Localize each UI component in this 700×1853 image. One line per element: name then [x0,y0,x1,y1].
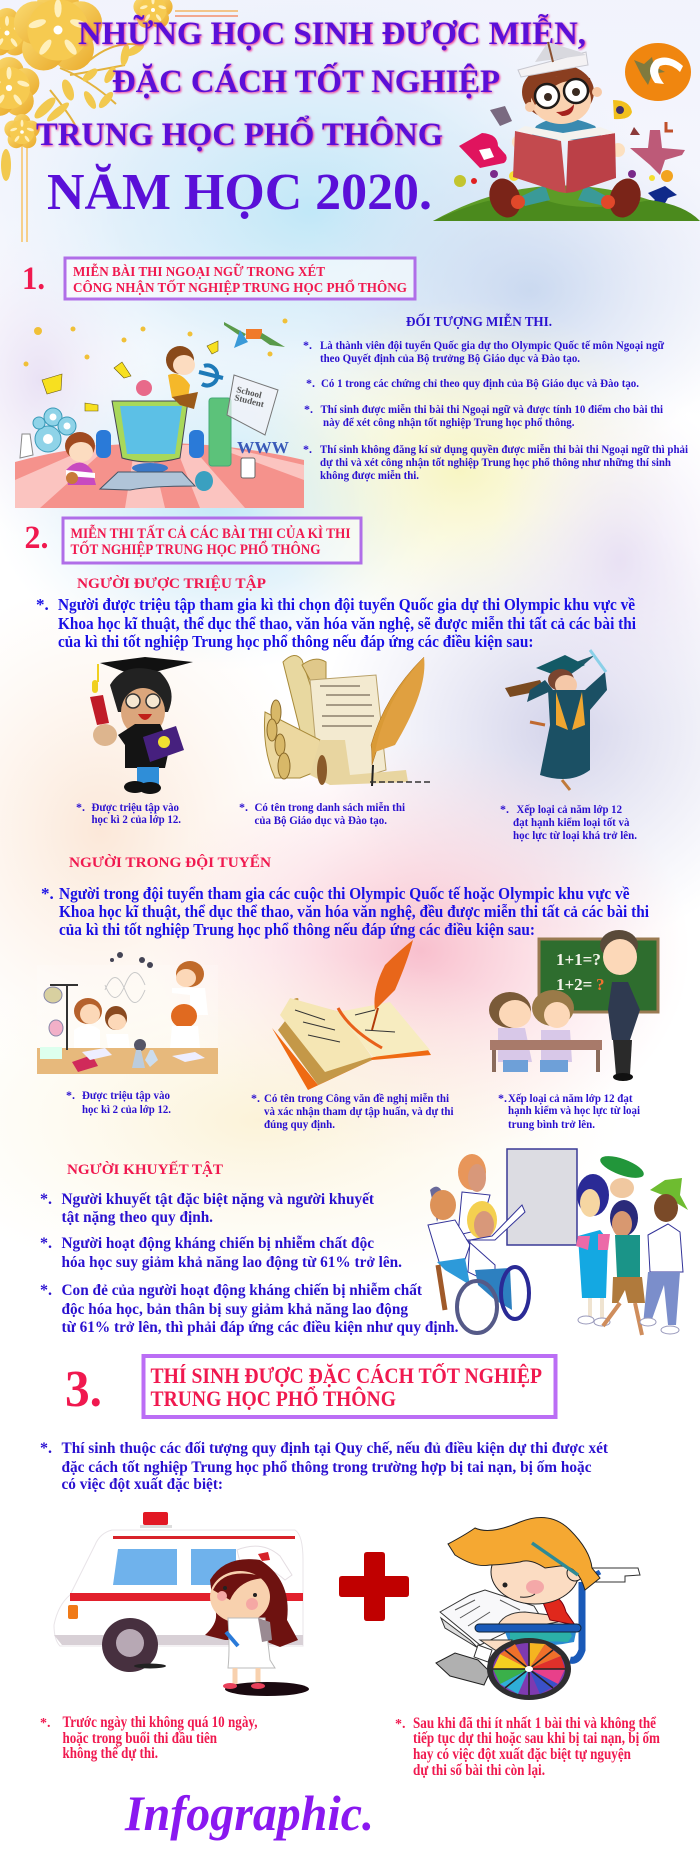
keyboard and mouse [100,472,195,490]
caption: team 3: trung bình trở lên. [508,1117,595,1131]
bullet 1: Là thành viên đội tuyển Quốc gia dự tho Olympic Quốc tế môn Ngoại ngữ [320,338,665,352]
body [505,1627,576,1646]
caption: team 2: *. [251,1091,260,1105]
illustration: classroom with blackboard: 1+2= [556,975,592,994]
bullet 1: theo Quyết định của Bộ trưởng Bộ Giáo dục và Đào tạo. [320,351,580,365]
section 3 heading box: THÍ SINH ĐƯỢC ĐẶC CÁCH TỐT NGHIỆP [150,1363,542,1388]
text block: team members: *. [41,884,54,903]
bullet 3: này để xét công nhận tốt nghiệp Trung học phổ thông. [323,415,574,429]
nurse [205,1546,309,1696]
title year: NĂM HỌC 2020. [47,163,432,221]
title: TRUNG HỌC PHỔ THÔNG [36,114,443,153]
text block: summoned students: Người được triệu tập tham gia kì thi chọn đội tuyển Quốc gia dự thi Olympic khu vực về [58,595,635,614]
person back hat [598,1152,646,1198]
section 3 number: 3. [65,1361,102,1418]
caption: after exam: *. [395,1717,406,1732]
head [491,1540,579,1604]
title: ĐẶC CÁCH TỐT NGHIỆP [112,61,500,100]
bullet 2: *. [306,376,315,390]
text block: special cases: đặc cách tốt nghiệp Trung học phổ thông trong trường hợp bị tai nạn, bị ốm hoặc [62,1459,592,1476]
illustration: boy reading on hill with letters [433,42,700,222]
subheading: disabled students: NGƯỜI KHUYẾT TẬT [67,1161,223,1178]
girl on floor [65,432,96,485]
bullet 4: không được miễn thi. [320,468,419,482]
illustration: graduate boy [90,657,193,794]
text block: disabled students: từ 61% trở lên, thì phải đáp ứng các điều kiện như quy định. [62,1319,458,1336]
text block: disabled students: Người hoạt động kháng chiến bị nhiễm chất độc [62,1235,374,1252]
text block: summoned students: của kì thi tốt nghiệp Trung học phổ thông nếu đáp ứng các điều kiện sau: [58,632,534,651]
hill [433,186,700,221]
section 1 heading box [65,258,415,299]
text block: summoned students: Khoa học kĩ thuật, thể dục thể thao, văn hóa văn nghệ, sẽ được miễn thi tất cả các bài thi [58,614,636,633]
CDs [33,408,76,452]
text block: special cases: có việc đột xuất đặc biệt: [62,1476,223,1493]
subheading: summoned students: NGƯỜI ĐƯỢC TRIỆU TẬP [77,575,266,592]
text block: team members [41,884,649,939]
illustration: open book with quill [272,940,431,1090]
text block: special cases: *. [40,1440,52,1457]
panel: target group for exemption [303,312,689,482]
illustration: scrolls and quill [264,655,431,786]
caption: summoned 1: học kì 2 của lớp 12. [92,812,181,826]
ambulance [54,1512,303,1672]
person girl blue dress [576,1174,610,1326]
text block: disabled students [40,1191,458,1336]
caption: summoned 1 [76,800,181,826]
hat [518,52,588,77]
illustration: classroom with blackboard: ? [596,975,604,994]
text block: special cases: Thí sinh thuộc các đối tượng quy định tại Quy chế, nếu đủ điều kiện dự thi được xét [62,1440,609,1457]
cup [241,458,255,478]
caption: after exam: Sau khi đã thi ít nhất 1 bài thi và không thể [413,1715,657,1732]
folders [42,341,218,411]
caption: before exam: hoặc trong buổi thi đầu tiên [62,1730,217,1747]
illustration: child reading in wheelchair [436,1518,640,1700]
caption: team 3: hạnh kiểm và học lực từ loại [508,1103,641,1117]
decorative gold floral corner [0,0,238,242]
caption: team 1: học kì 2 của lớp 12. [82,1102,171,1116]
caption: team 3: Xếp loại cả năm lớp 12 đạt [508,1091,632,1105]
hair [448,1518,600,1590]
stars [24,318,288,366]
illustration: children with computer: WWW [237,438,289,457]
text block: summoned students: *. [36,595,49,614]
title: NHỮNG HỌC SINH ĐƯỢC MIỄN, [78,13,586,52]
head [522,64,594,120]
bullet 3 [304,402,664,429]
illustration: children with computer [15,318,304,508]
tower [209,398,231,466]
icon: orange G blob [625,43,691,101]
caption: team 2 [251,1091,454,1131]
text block: team members: Người trong đội tuyển tham gia các cuộc thi Olympic Quốc tế hoặc Olympic khu vực về [59,884,630,903]
caption: summoned 3: học lực từ loại khá trở lên. [513,828,637,842]
armrest [475,1624,581,1632]
bullet 4 [303,442,689,482]
text block: special cases [40,1440,609,1493]
text block: team members: của kì thi tốt nghiệp Trung học phổ thông nếu đáp ứng các điều kiện sau: [59,920,535,939]
person in wheelchair [457,1201,529,1333]
bullet 1: *. [303,338,312,352]
speakers [96,430,111,458]
caption: team 2: Có tên trong Công văn đề nghị miễn thi [264,1091,450,1105]
caption: after exam: tiếp tục dự thi hoặc sau khi bị tai nạn, bị ốm [413,1730,660,1747]
text block: summoned students [36,595,636,651]
icon: plus cross [339,1552,409,1621]
book [440,1590,540,1645]
caption: summoned 2: *. [239,800,248,814]
person boy green shirt [603,1200,645,1335]
section 2 heading box: MIỄN THI TẤT CẢ CÁC BÀI THI CỦA KÌ THI [70,524,351,542]
person man green hat [640,1178,688,1334]
caption: summoned 1: *. [76,800,85,814]
caption: after exam: hay có việc đột xuất đặc biệt tự nguyện [413,1746,631,1763]
caption: team 2: đúng quy định. [264,1117,335,1131]
caption: after exam [395,1715,660,1779]
shoe [436,1653,490,1685]
section 1 number: 1. [22,261,45,297]
caption: before exam: *. [40,1716,50,1731]
section 2 number: 2. [24,520,48,556]
title [36,13,586,153]
text block: disabled students: độc hóa học, bản thân bị suy giảm khả năng lao động [62,1301,408,1318]
caption: team 2: và xác nhận tham dự tập huấn, và dự thi [264,1104,454,1118]
caption: team 3: *. [498,1091,507,1105]
illustration: ambulance with nurse [54,1512,309,1696]
handles and frame [590,1568,640,1582]
heading: ĐỐI TƯỢNG MIỄN THI. [406,312,552,330]
text block: disabled students: *. [40,1282,52,1299]
section 3 heading box: TRUNG HỌC PHỔ THÔNG [150,1386,396,1411]
bullet 1 [303,338,665,365]
footer title: Infographic. [124,1785,374,1841]
illustration: children with computer: School [236,384,263,400]
satellite [224,322,285,348]
subheading: team members: NGƯỜI TRONG ĐỘI TUYỂN [69,853,271,871]
bullet 3: Thí sinh được miễn thi bài thi Ngoại ngữ và được tính 10 điểm cho bài thi [320,402,664,416]
caption: summoned 3: Xếp loại cả năm lớp 12 [516,802,622,816]
letters [459,100,685,212]
text block: team members: Khoa học kĩ thuật, thể dục thể thao, văn hóa văn nghệ, đều được miễn thi tất cả các bài thi [59,902,649,921]
illustration: classroom with blackboard [489,930,658,1081]
caption: summoned 3: đạt hạnh kiểm loại tốt và [513,815,630,829]
text block: disabled students: Người khuyết tật đặc biệt nặng và người khuyết [62,1191,375,1208]
bullet 4: *. [303,442,312,456]
section 1 heading box: CÔNG NHẬN TỐT NGHIỆP TRUNG HỌC PHỔ THÔNG [73,278,407,296]
caption: after exam: dự thi số bài thi còn lại. [413,1762,545,1779]
monitor [112,401,188,462]
caption: summoned 2: của Bộ Giáo dục và Đào tạo. [254,813,387,827]
wheel [487,1638,571,1700]
boy on monitor [166,346,223,409]
caption: team 1: Được triệu tập vào [82,1088,170,1102]
caption: before exam: không thể dự thi. [62,1745,158,1762]
window [227,375,278,435]
text block: disabled students: Con đẻ của người hoạt động kháng chiến bị nhiễm chất [62,1282,423,1299]
caption: summoned 2: Có tên trong danh sách miễn thi [254,800,406,814]
illustration: group of students with board [428,1149,688,1335]
caption: summoned 2 [239,800,406,827]
illustration: science lab [37,952,218,1074]
caption: summoned 3: *. [500,802,509,816]
floor [15,443,304,508]
caption: team 3 [498,1091,641,1131]
book [513,131,566,193]
illustration: children with computer: Student [234,392,265,409]
caption: before exam [40,1714,258,1762]
caption: before exam: Trước ngày thi không quá 10 ngày, [62,1714,258,1731]
text block: disabled students: tật nặng theo quy định. [62,1209,213,1226]
text block: disabled students: *. [40,1235,52,1252]
illustration: classroom with blackboard: 1+1=? [556,950,601,969]
caption: team 1: *. [66,1088,75,1102]
person seated [428,1187,470,1310]
bullet 3: *. [304,402,313,416]
caption: summoned 1: Được triệu tập vào [92,800,179,814]
bullet 2: Có 1 trong các chứng chỉ theo quy định của Bộ Giáo dục và Đào tạo. [321,376,639,390]
section 2 heading box [63,518,361,563]
section 3 heading box [144,1356,556,1417]
text block: disabled students: *. [40,1191,52,1208]
bullet 4: dự thi và xét công nhận tốt nghiệp Trung học phổ thông như những thí sinh [320,455,671,469]
illustration: graduate girl [505,650,607,790]
section 2 heading box: TỐT NGHIỆP TRUNG HỌC PHỔ THÔNG [70,540,321,558]
section 1 heading box: MIỄN BÀI THI NGOẠI NGỮ TRONG XÉT [73,262,326,280]
caption: summoned 3 [500,802,637,842]
boy body [530,118,604,140]
caption: team 1 [66,1088,171,1116]
text block: disabled students: hóa học suy giảm khả năng lao động từ 61% trở lên. [62,1254,402,1271]
person back-left [458,1154,490,1235]
